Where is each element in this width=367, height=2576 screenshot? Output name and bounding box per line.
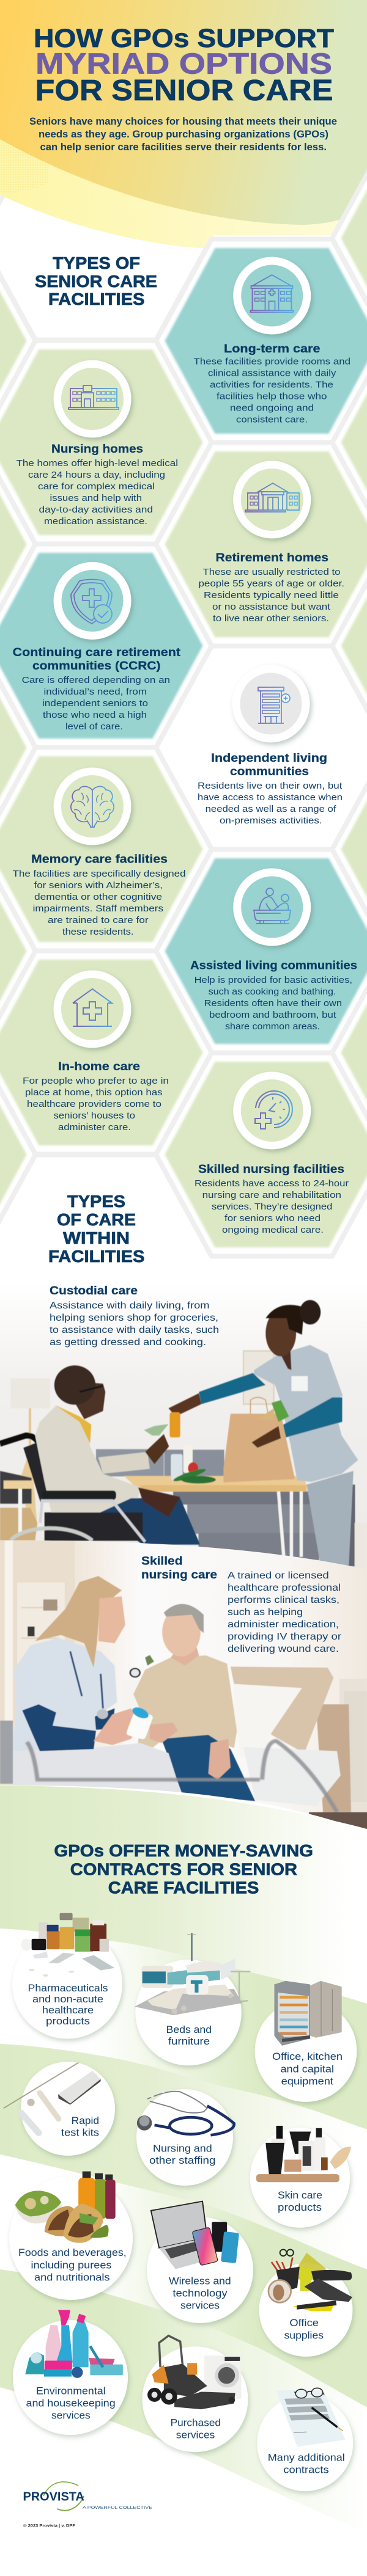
- intro text: Seniors have many choices for housing that meets their unique: [29, 116, 337, 127]
- text: assisted living communities: share common areas.: [225, 1021, 320, 1032]
- text: memory care facilities: dementia or other cognitive: [34, 892, 162, 902]
- heading: GPOs offer money-saving contracts: CONTRACTS FOR SENIOR: [70, 1859, 297, 1878]
- image: juice bottles, salad and tacos: [15, 2172, 116, 2243]
- text: long-term care: consistent care.: [236, 414, 308, 425]
- text: custodial care: Assistance with daily living, from: [50, 1301, 209, 1311]
- intro text: can help senior care facilities serve their residents for less.: [40, 142, 327, 153]
- text: continuing care retirement communities: Care is offered depending on an: [22, 675, 170, 685]
- label: skin care products: [278, 2190, 322, 2213]
- item: office, kitchen and capital equipment: [255, 1981, 357, 2102]
- title: FOR SENIOR CARE: [35, 74, 333, 107]
- logo: Provista: [23, 2482, 153, 2511]
- text: nursing homes: day-to-day activities and: [39, 505, 153, 515]
- panel: skilled nursing facilities: [156, 1053, 367, 1256]
- text: assisted living communities: such as cooking and bathing.: [209, 987, 336, 997]
- text: memory care facilities: [13, 869, 185, 937]
- label: pharmaceuticals: [28, 1983, 108, 2027]
- image: skin care bottles on a tray: [256, 2126, 351, 2182]
- heading: types of care within facilities: TYPES: [67, 1192, 125, 1211]
- text: skilled nursing facilities: Residents have access to 24-hour: [195, 1178, 349, 1189]
- label: pharmaceuticals: Pharmaceuticals: [28, 1983, 108, 1994]
- image: stethoscope: [137, 2090, 234, 2135]
- text: custodial care: helping seniors shop for groceries,: [50, 1313, 218, 1323]
- text: continuing care retirement communities: individual’s need, from: [44, 687, 147, 697]
- text: custodial care: [50, 1284, 219, 1348]
- image: pill bottles and blister packs: [21, 1913, 114, 1977]
- label: many additional contracts: [268, 2452, 345, 2475]
- text: skilled nursing care: healthcare professional: [228, 1583, 341, 1593]
- title: continuing care retirement communities: Continuing care retirement: [13, 646, 181, 659]
- label: pharmaceuticals: products: [46, 2016, 90, 2027]
- icon: home with cross: [73, 989, 112, 1026]
- image: hospital bed: [135, 1933, 250, 2015]
- text: skilled nursing care: nursing care: [141, 1568, 217, 1582]
- intro text: needs as they age. Group purchasing organizations (GPOs): [39, 129, 328, 140]
- text: in-home care: healthcare providers come to: [27, 1099, 161, 1109]
- title: independent living communities: communities: [230, 765, 309, 778]
- panel: in-home care: [0, 950, 212, 1155]
- label: purchased services: Purchased: [171, 2417, 221, 2428]
- text: skilled nursing care: delivering wound care.: [228, 1644, 339, 1654]
- label: pharmaceuticals: healthcare: [42, 2005, 94, 2016]
- text: retirement homes: to live near other seniors.: [213, 613, 329, 624]
- label: foods and beverages: [18, 2247, 127, 2283]
- text: nursing homes: [16, 458, 178, 527]
- title: continuing care retirement communities: [13, 646, 181, 673]
- text: skilled nursing care: [141, 1555, 342, 1654]
- item: foods and beverages: [9, 2172, 133, 2300]
- image: laptop and phones: [151, 2202, 239, 2269]
- text: custodial care: to assistance with daily tasks, such: [50, 1325, 219, 1335]
- text: memory care facilities: for seniors with Alzheimer’s,: [34, 880, 163, 891]
- item: pharmaceuticals: [12, 1913, 122, 2039]
- heading: GPOs offer money-saving contracts: CARE FACILITIES: [108, 1878, 259, 1897]
- text: long-term care: activities for residents. The: [210, 380, 333, 390]
- icon: retirement building: [245, 483, 299, 512]
- text: independent living communities: [198, 781, 343, 826]
- text: assisted living communities: Residents often have their own: [204, 998, 342, 1009]
- label: beds and furniture: [166, 2024, 212, 2047]
- text: retirement homes: [198, 567, 344, 624]
- item: rapid test kits: [4, 2062, 115, 2156]
- text: skilled nursing facilities: [195, 1178, 349, 1235]
- text: retirement homes: Residents typically need little: [204, 590, 339, 600]
- panel: continuing care retirement communities: [0, 544, 212, 748]
- title: independent living communities: Independent living: [211, 751, 327, 765]
- intro text: [29, 116, 337, 153]
- text: continuing care retirement communities: level of care.: [65, 721, 123, 732]
- heading: GPOs offer money-saving contracts: [54, 1841, 313, 1897]
- text: long-term care: [193, 357, 350, 425]
- text: assisted living communities: [195, 975, 352, 1032]
- label: office supplies: Office: [289, 2318, 319, 2329]
- label: nursing and other staffing: [149, 2143, 215, 2166]
- text: in-home care: place at home, this option has: [25, 1087, 163, 1098]
- wave: green and white bands: [0, 1786, 367, 2533]
- text: custodial care: as getting dressed and cooking.: [50, 1337, 206, 1348]
- label: foods and beverages: and nutritionals: [34, 2272, 110, 2283]
- logo: Provista: A POWERFUL COLLECTIVE: [83, 2506, 153, 2510]
- label: foods and beverages: including purees: [31, 2260, 111, 2271]
- text: retirement homes: These are usually restricted to: [203, 567, 340, 577]
- icon: shield with cross and check: [71, 579, 112, 624]
- background honeycomb cells: [0, 137, 367, 1256]
- title: nursing homes: Nursing homes: [51, 442, 143, 456]
- text: memory care facilities: The facilities are specifically designed: [13, 869, 185, 879]
- icon: nursing home building: [69, 385, 119, 409]
- label: many additional contracts: Many additional: [268, 2452, 345, 2463]
- label: environmental and housekeeping services: and housekeeping: [26, 2398, 116, 2409]
- text: skilled nursing facilities: ongoing medical care.: [222, 1225, 324, 1235]
- panel: memory care facilities: [0, 748, 212, 950]
- label: nursing and other staffing: Nursing and: [153, 2143, 212, 2154]
- icon: clock with cross: [255, 1091, 292, 1129]
- title: retirement homes: Retirement homes: [215, 551, 328, 564]
- image: contract, glasses and pen: [276, 2388, 345, 2446]
- icon: hospital building: [251, 275, 294, 312]
- label: wireless and technology services: Wireless and: [169, 2275, 231, 2286]
- label: skin care products: products: [278, 2202, 322, 2213]
- item: wireless and technology services: [147, 2202, 253, 2323]
- label: office, kitchen and capital equipment: Office, kitchen: [272, 2051, 343, 2062]
- icon: tall building with cross: [258, 687, 290, 723]
- text: skilled nursing care: such as helping: [228, 1607, 303, 1618]
- text: long-term care: need ongoing and: [230, 403, 314, 413]
- text: independent living communities: needed as well as a range of: [206, 804, 336, 814]
- item: purchased services: [142, 2336, 248, 2452]
- text: custodial care: Custodial care: [50, 1284, 138, 1297]
- text: skilled nursing care: Skilled: [141, 1555, 182, 1568]
- label: rapid test kits: [61, 2115, 99, 2138]
- label: purchased services: [171, 2417, 221, 2440]
- icon: brain: [71, 786, 114, 827]
- text: nursing homes: The homes offer high-level medical: [16, 458, 178, 469]
- text: skilled nursing facilities: nursing care and rehabilitation: [202, 1190, 341, 1200]
- panel: nursing homes: [0, 341, 212, 544]
- text: long-term care: These facilities provide rooms and: [193, 357, 350, 367]
- heading: types of care within facilities: WITHIN: [63, 1228, 130, 1247]
- label: beds and furniture: Beds and: [166, 2024, 212, 2035]
- heading: types of senior care facilities: SENIOR CARE: [35, 272, 157, 291]
- text: assisted living communities: bedroom and bathroom, but: [209, 1010, 336, 1020]
- upper right cell: [332, 137, 367, 340]
- heading: types of care within facilities: FACILITIES: [48, 1247, 144, 1266]
- text: skilled nursing care: A trained or licensed: [228, 1571, 329, 1581]
- image: test kit cassette and swab: [4, 2063, 101, 2133]
- text: in-home care: seniors’ houses to: [54, 1111, 135, 1121]
- copyright: © 2023 Provista | v. DPF: [23, 2523, 75, 2528]
- brown photo edge: [311, 1813, 367, 1829]
- heading: types of senior care facilities: [35, 254, 157, 308]
- item: many additional contracts: [257, 2388, 353, 2491]
- title: assisted living communities: Assisted living communities: [190, 959, 357, 972]
- text: nursing homes: issues and help with: [50, 493, 142, 503]
- text: nursing homes: care 24 hours a day, including: [28, 470, 165, 480]
- panel: types of care hexagon: [0, 1155, 212, 1257]
- heading: types of care within facilities: [48, 1192, 144, 1266]
- text: in-home care: [23, 1076, 169, 1133]
- text: memory care facilities: are trained to care for: [48, 915, 149, 925]
- heading: types of senior care facilities: FACILITIES: [48, 290, 144, 308]
- panel: independent living communities: [156, 646, 367, 849]
- title: MYRIAD OPTIONS: [35, 48, 332, 81]
- text: continuing care retirement communities: [22, 675, 170, 732]
- item: nursing and other staffing: [136, 2089, 234, 2186]
- title: continuing care retirement communities: communities (CCRC): [32, 659, 160, 673]
- item: office supplies: [259, 2249, 352, 2357]
- text: long-term care: clinical assistance with daily: [208, 368, 336, 379]
- item: skin care products: [250, 2126, 351, 2228]
- text: continuing care retirement communities: independent seniors to: [42, 698, 148, 709]
- label: foods and beverages: Foods and beverages,: [18, 2247, 127, 2258]
- label: rapid test kits: test kits: [61, 2127, 99, 2138]
- label: office, kitchen and capital equipment: [272, 2051, 343, 2087]
- panel: long-term care: [156, 239, 367, 442]
- label: office supplies: supplies: [284, 2330, 324, 2341]
- label: many additional contracts: contracts: [283, 2464, 329, 2475]
- label: skin care products: Skin care: [278, 2190, 322, 2201]
- text: long-term care: facilities help those who: [217, 391, 327, 402]
- image: cleaning supplies: [25, 2310, 123, 2378]
- label: environmental and housekeeping services: [26, 2385, 116, 2421]
- label: wireless and technology services: services: [180, 2301, 220, 2311]
- label: environmental and housekeeping services: services: [51, 2410, 91, 2421]
- text: skilled nursing facilities: services. They’re designed: [212, 1202, 332, 1212]
- text: in-home care: For people who prefer to age in: [23, 1076, 169, 1086]
- text: memory care facilities: impairments. Staff members: [33, 903, 163, 914]
- image: office supplies pile: [269, 2249, 352, 2311]
- label: pharmaceuticals: and non-acute: [32, 1994, 103, 2005]
- text: assisted living communities: Help is provided for basic activities,: [195, 975, 352, 985]
- photo: nurse talking to an older woman: [0, 1527, 367, 1833]
- text: continuing care retirement communities: those who need a high: [43, 710, 147, 720]
- text: independent living communities: on-premises activities.: [220, 815, 322, 826]
- logo: Provista: PROVISTA: [23, 2490, 84, 2503]
- text: skilled nursing care: performs clinical tasks,: [228, 1595, 339, 1605]
- label: office supplies: [284, 2318, 324, 2341]
- label: rapid test kits: Rapid: [72, 2115, 99, 2126]
- text: in-home care: administer care.: [58, 1122, 131, 1133]
- label: environmental and housekeeping services: Environmental: [36, 2385, 106, 2396]
- heading: types of senior care facilities: TYPES OF: [53, 254, 140, 272]
- text: retirement homes: or no assistance but want: [212, 602, 331, 612]
- label: beds and furniture: furniture: [168, 2036, 210, 2047]
- image: refrigerated cases: [274, 1981, 342, 2046]
- label: wireless and technology services: [169, 2275, 231, 2311]
- title: long-term care: Long-term care: [224, 342, 321, 356]
- title: [34, 24, 334, 107]
- panel: retirement homes: [156, 442, 367, 646]
- title: independent living communities: [211, 751, 327, 778]
- text: nursing homes: care for complex medical: [38, 481, 155, 492]
- text: independent living communities: Residents live on their own, but: [198, 781, 343, 791]
- panel: assisted living communities: [156, 849, 367, 1053]
- title: HOW GPOs SUPPORT: [34, 24, 334, 53]
- text: memory care facilities: these residents.: [62, 927, 133, 937]
- text: independent living communities: have access to assistance when: [198, 792, 343, 803]
- title: memory care facilities: Memory care facilities: [31, 853, 168, 866]
- label: office, kitchen and capital equipment: and capital: [280, 2063, 334, 2074]
- image: mower and washing machine: [147, 2336, 242, 2409]
- label: nursing and other staffing: other staffing: [149, 2155, 215, 2166]
- label: wireless and technology services: technology: [172, 2288, 228, 2299]
- label: office, kitchen and capital equipment: equipment: [281, 2076, 333, 2087]
- text: nursing homes: medication assistance.: [44, 516, 147, 527]
- heading: types of care within facilities: OF CARE: [57, 1210, 136, 1229]
- text: retirement homes: people 55 years of age or older.: [198, 578, 344, 589]
- text: skilled nursing care: administer medication,: [228, 1619, 339, 1630]
- header gradient background: [0, 0, 367, 225]
- heading: GPOs offer money-saving contracts: GPOs OFFER MONEY-SAVING: [54, 1841, 313, 1860]
- icon: caregiver and bath: [254, 888, 291, 924]
- photo: nurse handing groceries to a man in a wheelchair: [0, 1283, 367, 1572]
- text: skilled nursing care: providing IV therapy or: [228, 1632, 342, 1642]
- halftone dots: [0, 140, 49, 192]
- title: in-home care: In-home care: [58, 1060, 140, 1073]
- text: skilled nursing facilities: for seniors who need: [224, 1213, 321, 1224]
- header pale yellow band: [0, 122, 367, 248]
- item: environmental and housekeeping services: [13, 2310, 128, 2435]
- item: beds and furniture: [135, 1933, 250, 2065]
- label: purchased services: services: [176, 2429, 215, 2440]
- title: skilled nursing facilities: Skilled nursing facilities: [198, 1162, 344, 1176]
